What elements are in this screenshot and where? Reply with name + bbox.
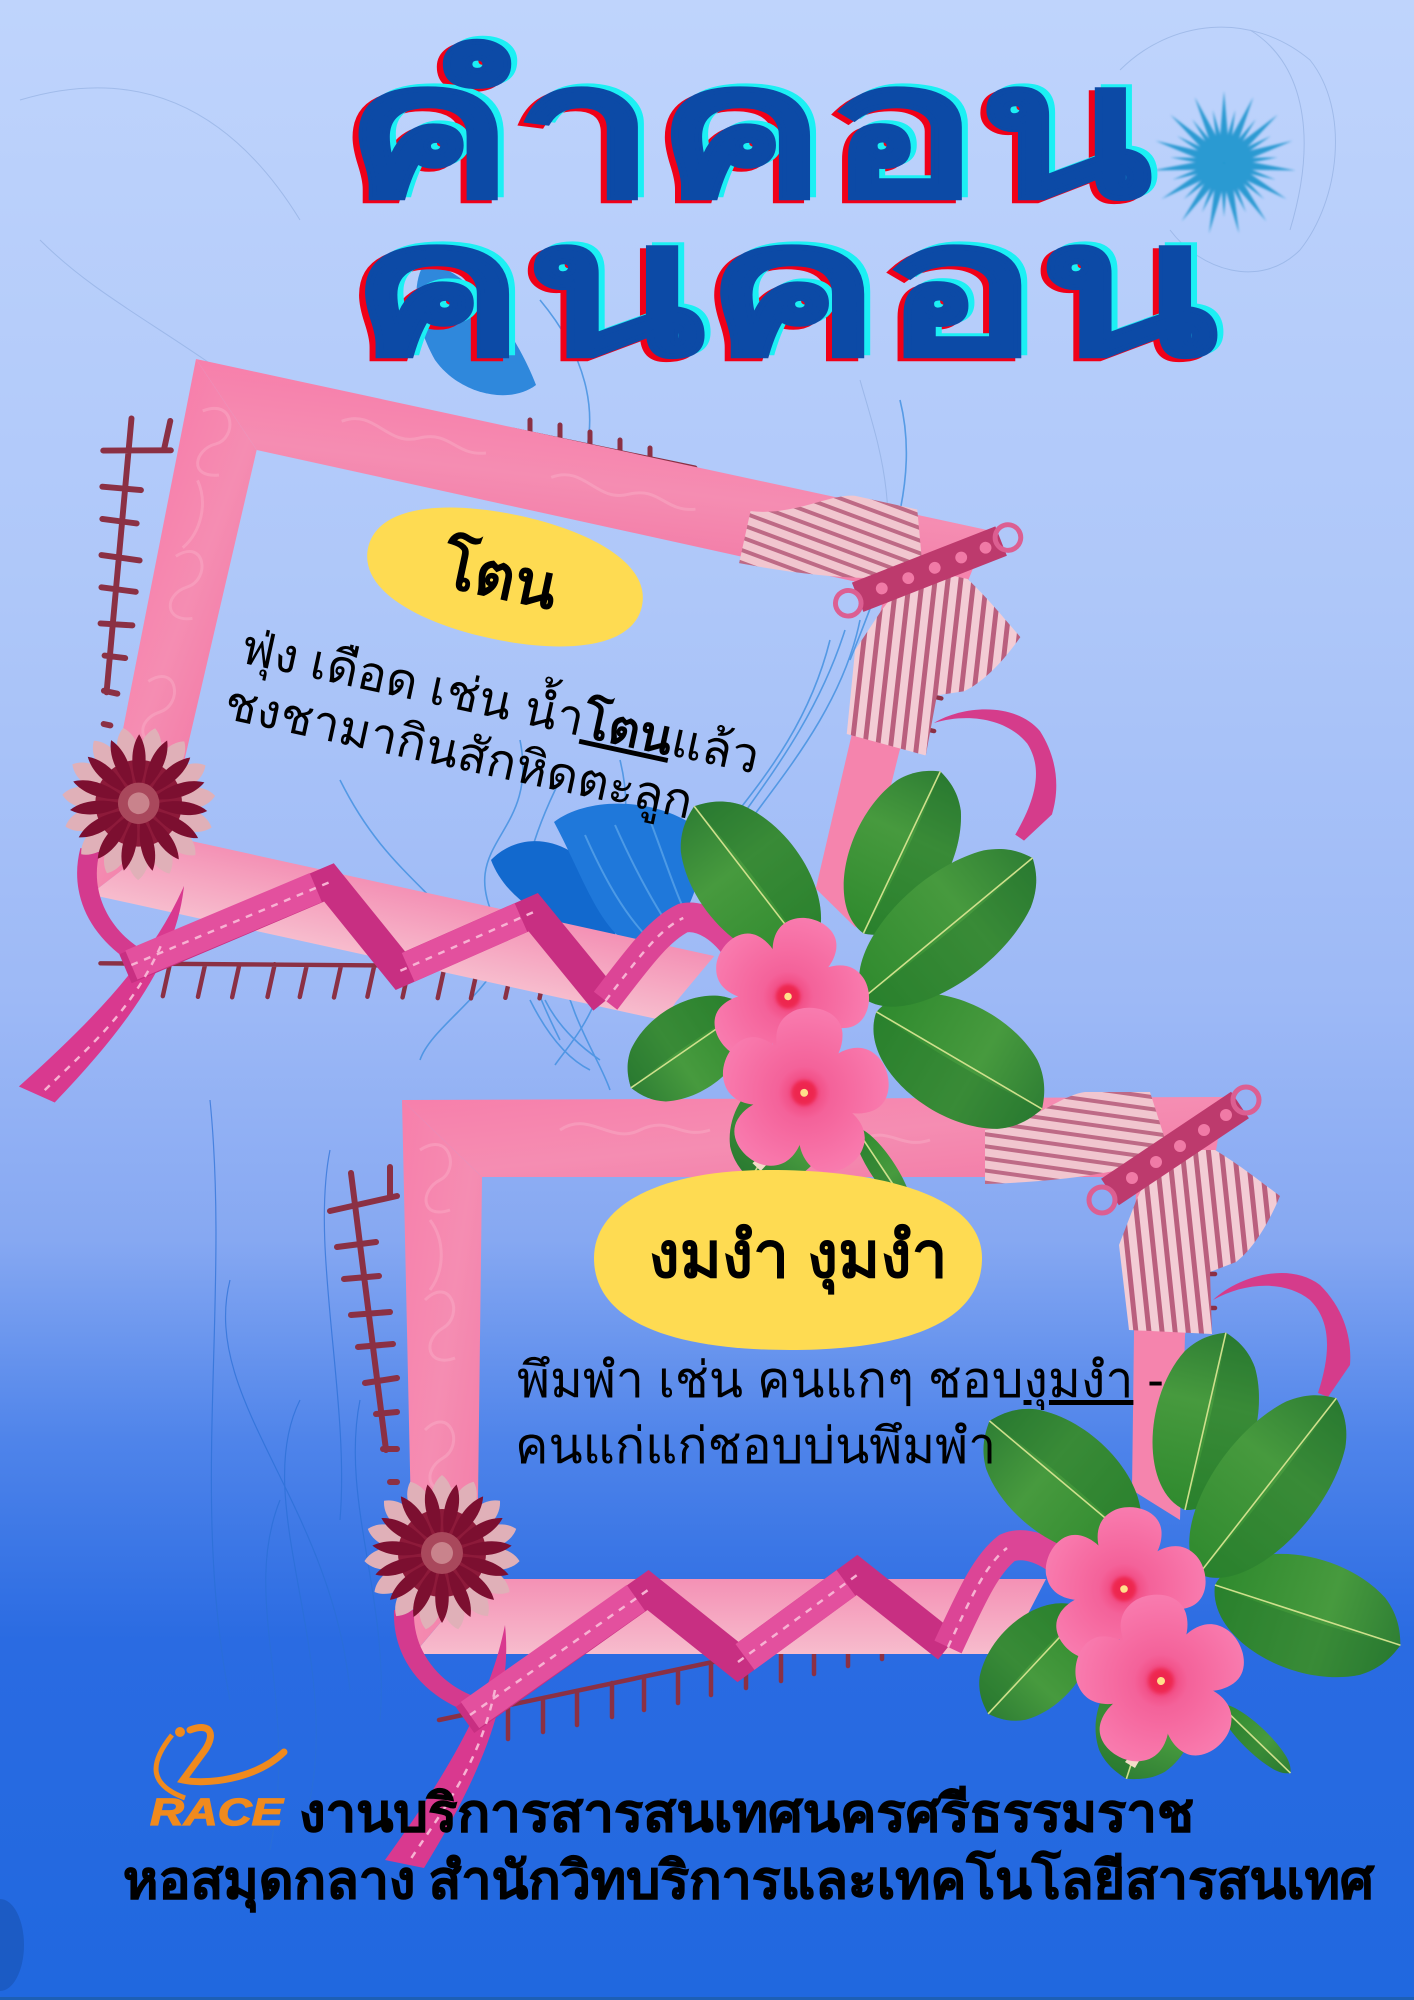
pink ribbon — [17, 522, 1072, 1298]
logo: RACE — [150, 1727, 285, 1834]
footer text: หอสมุดกลาง สำนักวิทบริการและเทคโนโลยีสารสนเทศ — [123, 1849, 1375, 1913]
logo: RACE: RACE — [150, 1792, 285, 1834]
icon: striped bow — [707, 470, 1043, 770]
title line one: คำคอน — [344, 28, 1152, 237]
yellow label: งมงำ งุมงำ: งมงำ งุมงำ — [648, 1219, 948, 1295]
panel: frame two (งมงำ งุมงำ) decorations — [330, 1087, 1414, 1868]
title line one: คำคอน — [350, 25, 1158, 234]
icon: leaves and pink flowers — [954, 1321, 1414, 1794]
icon: striped bow — [985, 1087, 1280, 1334]
title line two: คนคอน — [356, 183, 1224, 392]
icon: dark red daisy — [363, 1475, 521, 1632]
text block: งมงำ definition: คนแก่แก่ชอบบ่นพึมพำ — [515, 1418, 996, 1474]
footer text: งานบริการสารสนเทศนครศรีธรรมราช — [299, 1785, 1194, 1843]
stitches — [0, 408, 964, 1146]
pink frame — [402, 1097, 1225, 1654]
yellow label: งมงำ งุมงำ — [594, 1170, 982, 1350]
stitches — [330, 1167, 1215, 1739]
text block: โตน definition: ชงชามากินสักหิดตะลูก — [219, 676, 698, 832]
corner blob — [0, 1899, 24, 1991]
text block: โตน definition: ฟุ่ง เดือด เช่น น้ำโตนแล้ว — [235, 611, 766, 787]
title — [338, 25, 1224, 398]
title line two: คนคอน — [350, 186, 1218, 395]
icon: leaves and pink flowers — [581, 703, 1128, 1256]
pink ribbon — [385, 1273, 1350, 1868]
title line one: คำคอน — [338, 31, 1146, 240]
yellow label: โตน: โตน — [435, 528, 564, 623]
title line two: คนคอน — [344, 189, 1212, 398]
icon: jellyfish behind title — [416, 262, 536, 395]
icon: dark red daisy — [46, 712, 231, 895]
text block: งมงำ definition — [515, 1352, 1164, 1474]
panel: frame one (โตน) decorations — [0, 331, 1180, 1314]
text block: งมงำ definition: พึมพำ เช่น คนแกๆ ชอบงุมงำ - — [517, 1352, 1164, 1410]
footer text — [123, 1785, 1375, 1913]
icon: jellyfish behind frame one — [491, 804, 701, 950]
title line two — [344, 183, 1224, 398]
stitches above frame one — [512, 420, 695, 470]
yellow label: โตน — [355, 486, 655, 668]
pink frame — [79, 356, 988, 1066]
icon: spiky jellyfish top right — [1152, 91, 1296, 234]
